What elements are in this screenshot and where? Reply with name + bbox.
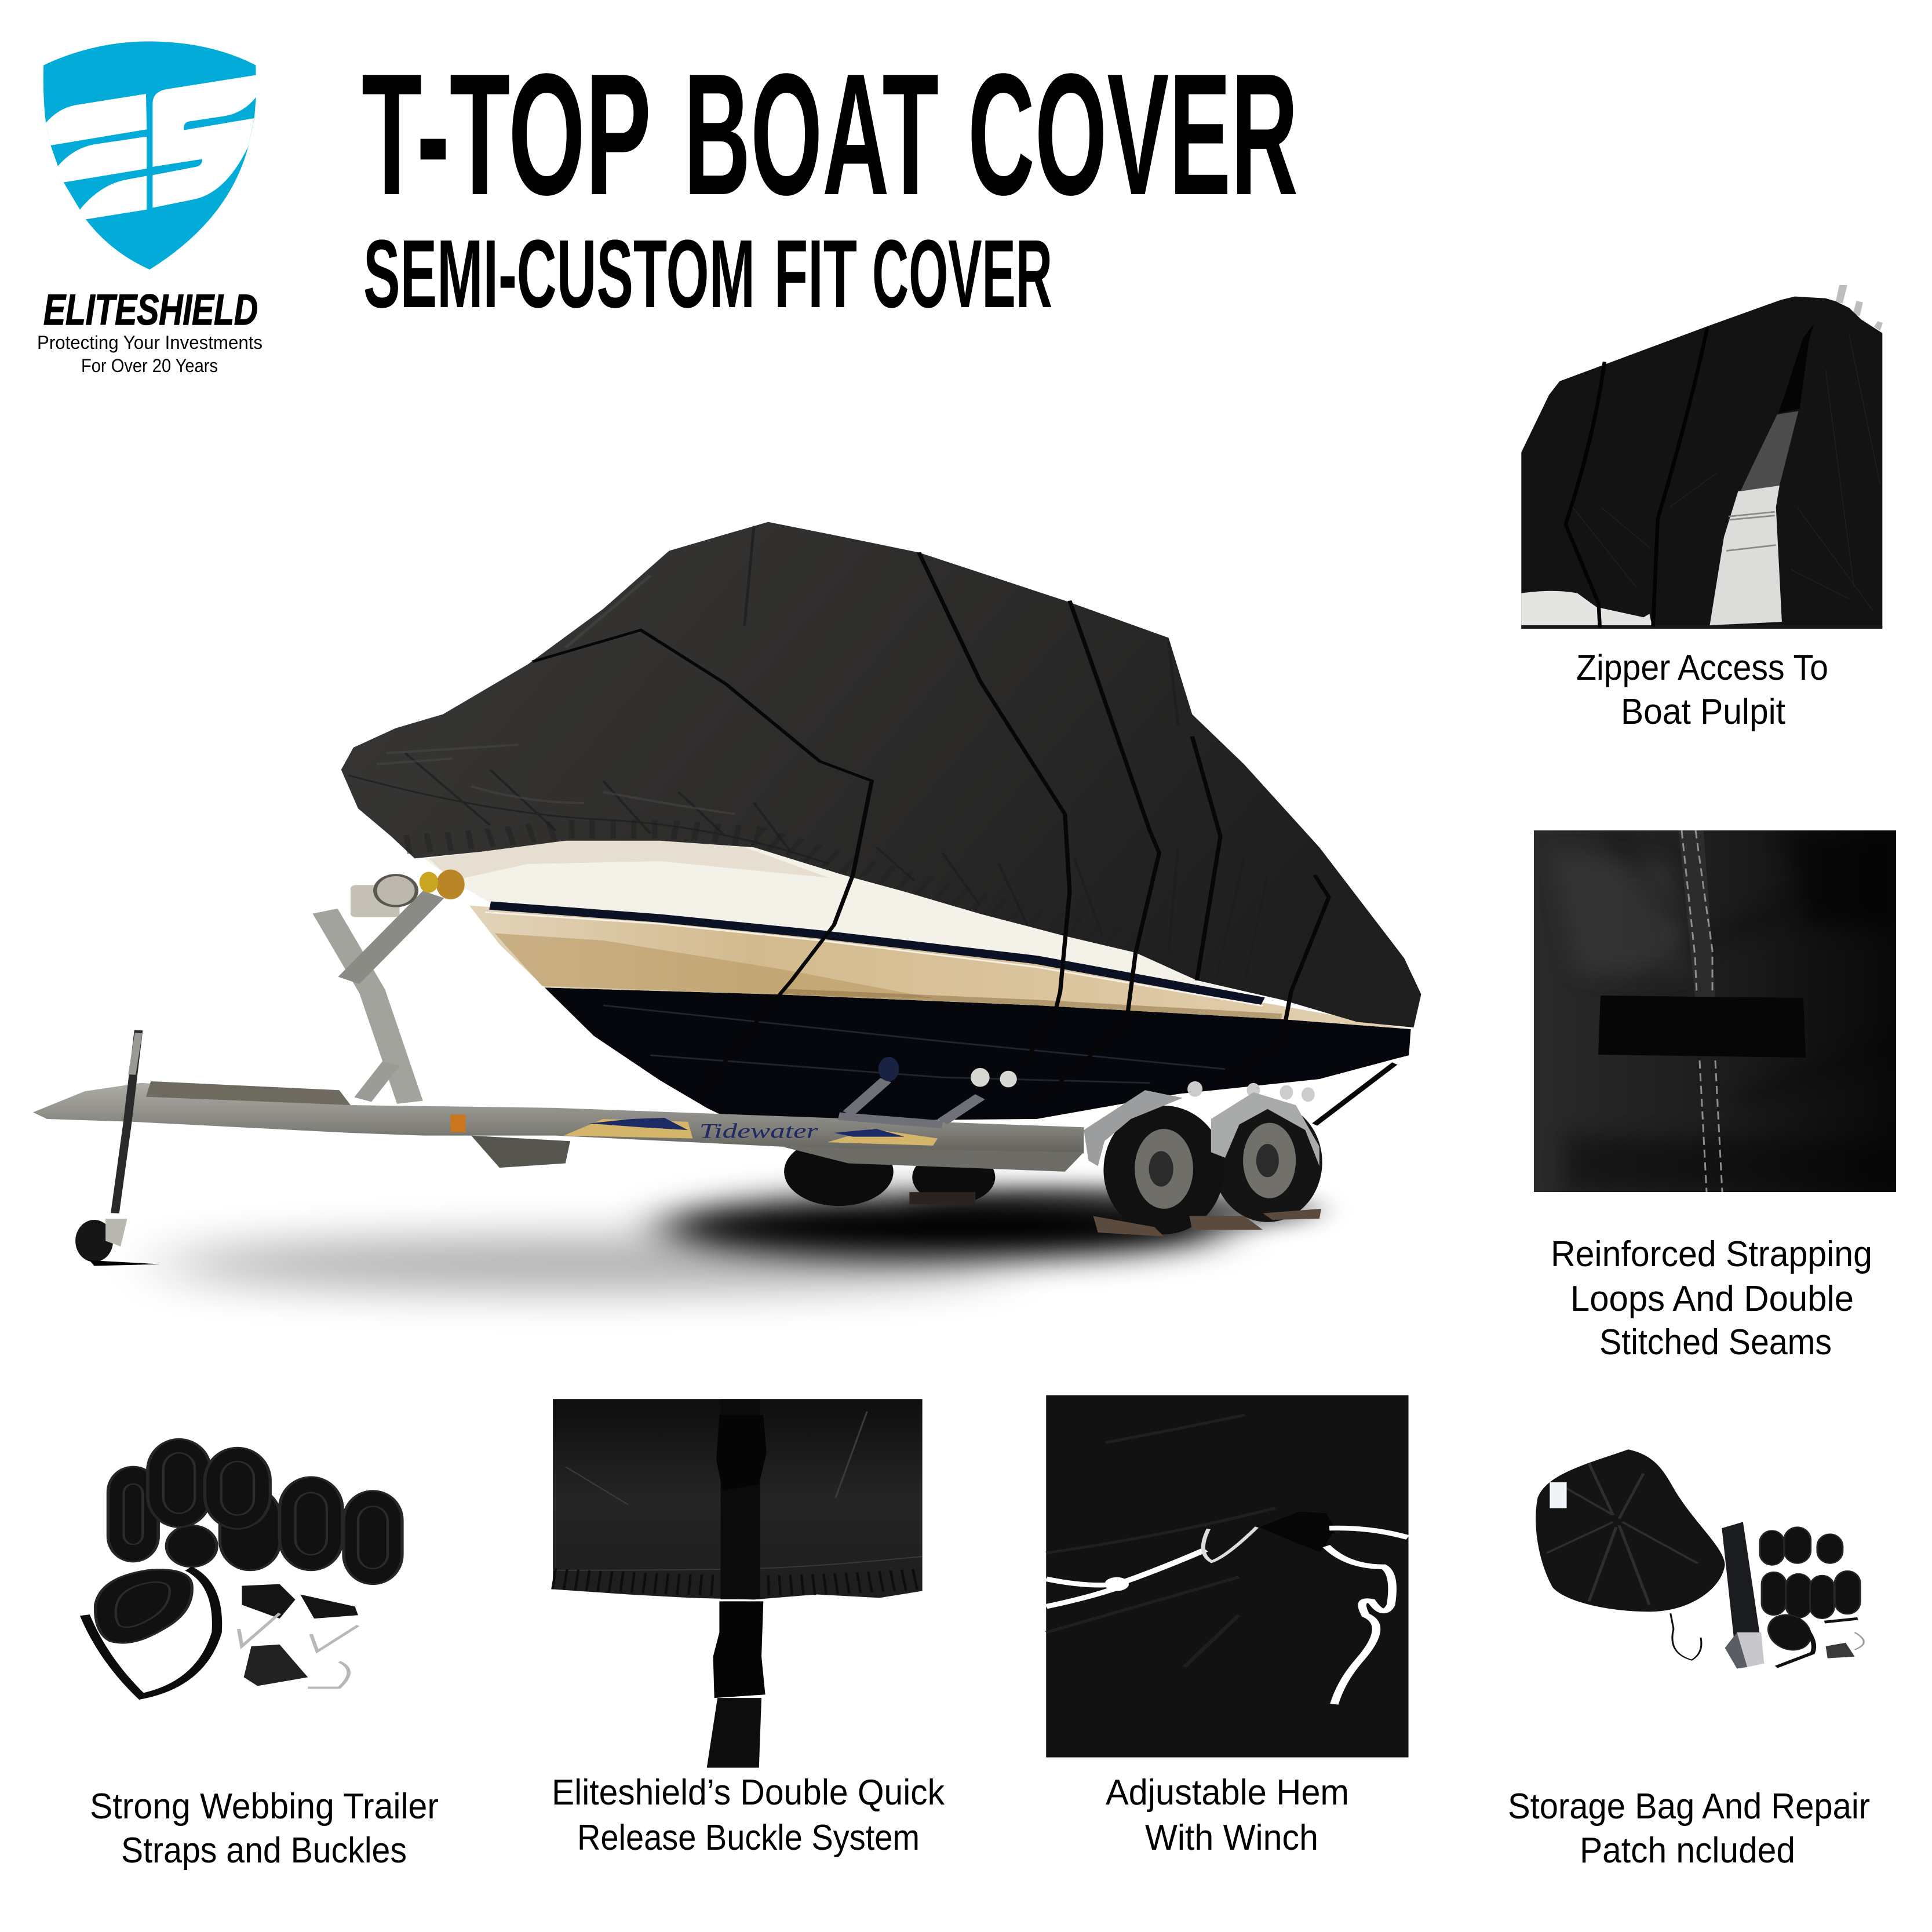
caption: adjustable hem: With Winch — [1145, 1818, 1318, 1858]
panel: zipper access — [1521, 285, 1883, 732]
hull base rail — [1521, 625, 1882, 629]
caption: trailer straps: Straps and Buckles — [121, 1831, 407, 1871]
cover folds — [1573, 336, 1880, 610]
panel: storage bag — [1508, 1449, 1870, 1871]
subtitle: COVER — [872, 220, 1052, 328]
caption: reinforced strapping — [1551, 1234, 1872, 1362]
panel: reinforced strapping — [1534, 830, 1896, 1362]
caption: zipper access: Zipper Access To — [1576, 648, 1828, 688]
pale hull left — [1521, 591, 1652, 625]
loose strap — [85, 1569, 217, 1696]
panel: adjustable hem — [1046, 1395, 1409, 1858]
caption: storage bag: Patch ncluded — [1580, 1831, 1795, 1871]
inner wheels — [784, 1138, 995, 1206]
photo: buckle on hem — [553, 1399, 923, 1768]
caption: zipper access: Boat Pulpit — [1621, 692, 1785, 732]
tagline: Protecting Your Investments — [37, 332, 263, 353]
title: COVER — [968, 38, 1298, 231]
navy hull stripe — [490, 906, 1263, 1001]
repair patch — [1722, 1522, 1764, 1667]
caption: trailer straps — [90, 1787, 439, 1871]
panel: quick release buckle — [552, 1399, 945, 1858]
trailer frame — [33, 1081, 1084, 1172]
title — [362, 38, 1298, 231]
tongue jack and wheel — [75, 1030, 160, 1266]
icon: shield — [43, 41, 258, 269]
dark hull — [545, 987, 1411, 1122]
caption: storage bag — [1508, 1787, 1870, 1871]
cover hem gathers — [405, 829, 1409, 1016]
title: T-TOP — [362, 38, 651, 231]
tagline: For Over 20 Years — [81, 355, 218, 376]
caption: storage bag: Storage Bag And Repair — [1508, 1787, 1870, 1827]
photo: bag, repair patch and straps — [1536, 1449, 1864, 1669]
subtitle: FIT — [774, 220, 857, 328]
photo: strap loop and seams — [1534, 830, 1896, 1192]
strap coils — [96, 1439, 402, 1643]
white upper hull — [424, 841, 1267, 1000]
t-top pipes — [1836, 285, 1883, 331]
caption: trailer straps: Strong Webbing Trailer — [90, 1787, 439, 1827]
photo: webbing straps and buckles — [85, 1439, 402, 1696]
caption: quick release buckle — [552, 1773, 945, 1858]
mesh bag — [1536, 1449, 1725, 1612]
subtitle: SEMI-CUSTOM — [363, 220, 755, 328]
winch stand — [325, 869, 465, 1102]
caption: quick release buckle: Release Buckle System — [577, 1818, 920, 1858]
ratchet straps — [242, 1584, 358, 1618]
opening: hull — [1709, 486, 1782, 625]
caption: adjustable hem: Adjustable Hem — [1106, 1773, 1349, 1813]
caption: adjustable hem — [1106, 1773, 1349, 1858]
panel: trailer straps — [85, 1439, 439, 1871]
main photo: covered boat on trailer — [33, 522, 1421, 1291]
caption: reinforced strapping: Loops And Double — [1570, 1279, 1854, 1319]
opening: grey interior — [1741, 411, 1798, 491]
cover straps — [1566, 327, 1707, 628]
ground shadow — [160, 1189, 1319, 1291]
tandem wheels and fenders — [1084, 1090, 1322, 1237]
caption: quick release buckle: Eliteshield’s Double Quick — [552, 1773, 945, 1813]
tagline — [37, 332, 263, 376]
caption: zipper access — [1576, 648, 1828, 732]
caption: reinforced strapping: Reinforced Strapping — [1551, 1234, 1872, 1274]
rollers — [839, 1057, 1315, 1125]
trailer brand decal — [564, 1118, 938, 1146]
caption: reinforced strapping: Stitched Seams — [1599, 1322, 1832, 1362]
logo: Eliteshield — [37, 41, 263, 376]
title: BOAT — [684, 38, 939, 231]
boat cover — [341, 522, 1421, 1027]
trailer brand decal: Tidewater — [699, 1119, 818, 1142]
photo: zipper access — [1521, 285, 1883, 629]
photo: hem with winch — [1046, 1395, 1409, 1758]
black cover — [1521, 297, 1882, 629]
beige hull — [469, 906, 1411, 1029]
cover wrinkles — [349, 526, 1267, 986]
brand name: ELITESHIELD — [43, 286, 258, 334]
small strap coils — [1760, 1527, 1860, 1653]
elastic hem gathers — [553, 1579, 923, 1586]
straps over cover — [533, 552, 1395, 1125]
